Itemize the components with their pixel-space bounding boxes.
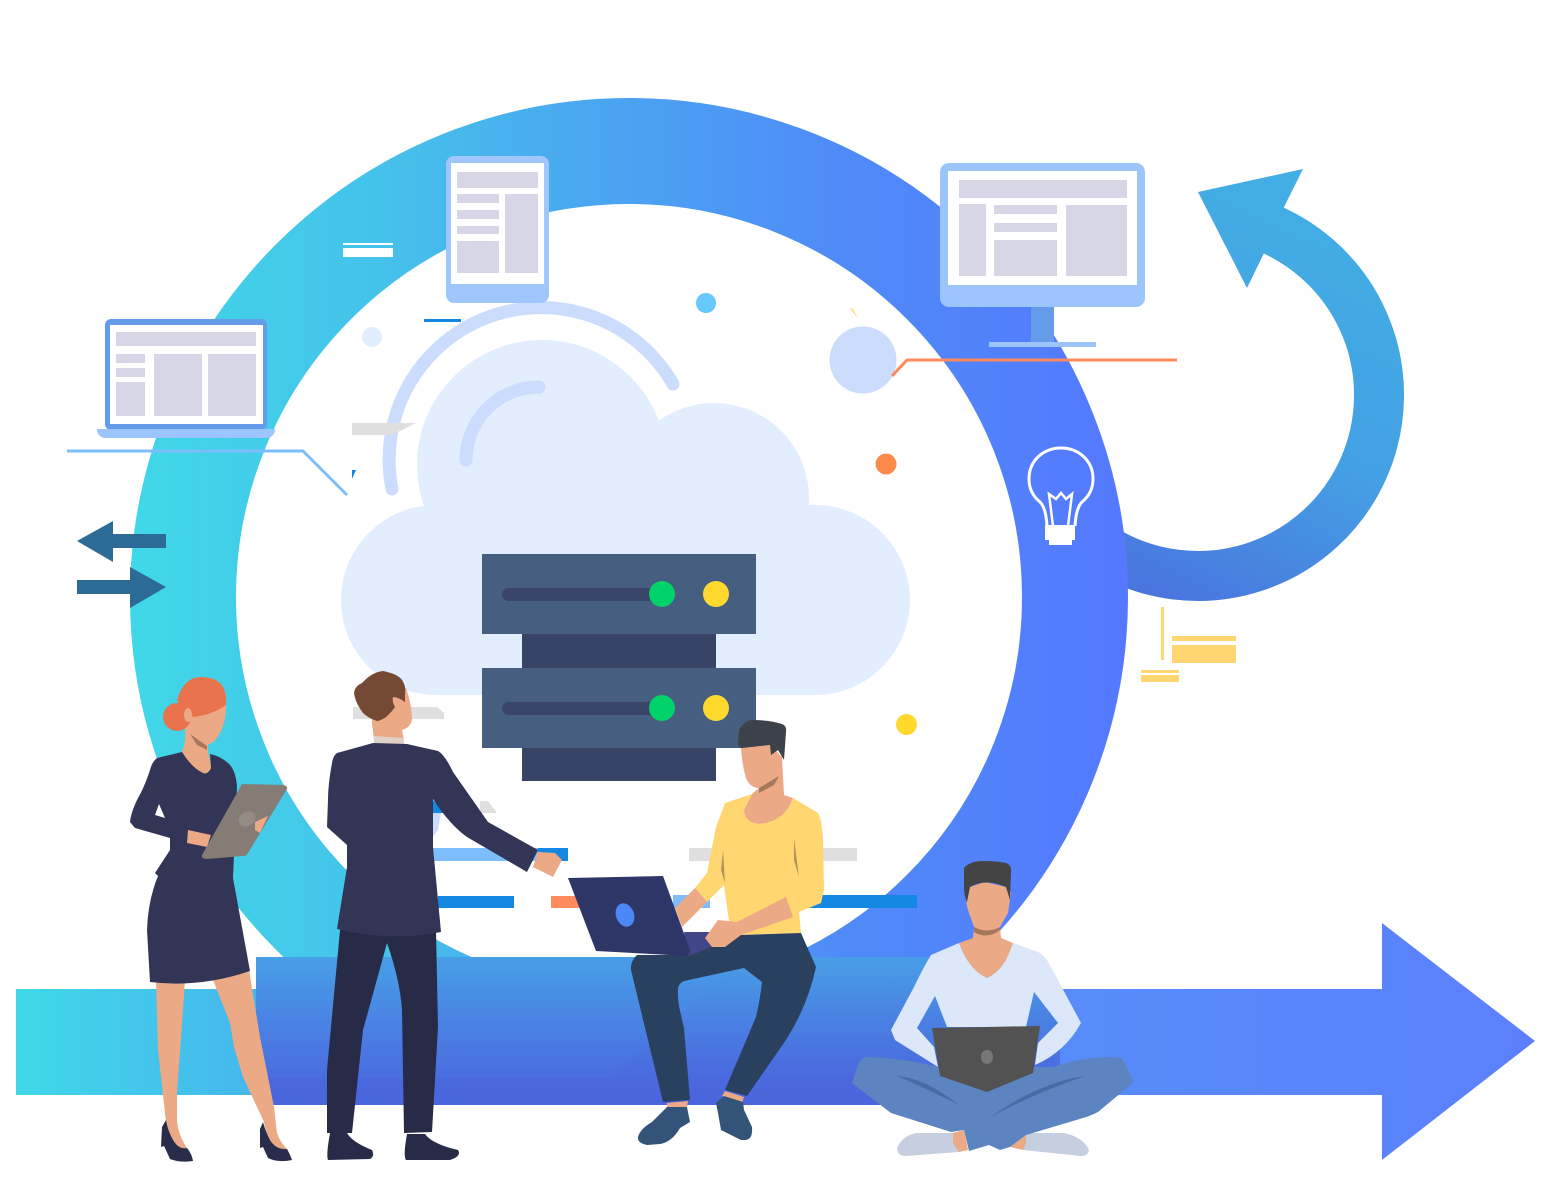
person: standing man in suit bbox=[327, 671, 562, 1160]
collar bbox=[374, 736, 404, 745]
person: seated man with laptop bbox=[568, 720, 824, 1145]
face and neck bbox=[741, 745, 793, 824]
hand bbox=[533, 852, 562, 877]
person: woman with tablet bbox=[130, 677, 292, 1162]
laptop lid bbox=[568, 876, 690, 956]
connector line: orange bbox=[892, 360, 1177, 376]
connector line: light blue bbox=[67, 451, 347, 495]
jacket bbox=[327, 743, 538, 936]
shirt bbox=[695, 794, 824, 935]
laptop bbox=[932, 1026, 1040, 1092]
cloud bbox=[341, 340, 910, 695]
text placeholder bars bbox=[343, 243, 917, 908]
hand left bbox=[187, 830, 211, 847]
icon: light bulb bbox=[1029, 448, 1093, 545]
trousers bbox=[852, 1057, 1134, 1151]
dress bbox=[130, 752, 250, 984]
hair bbox=[738, 720, 786, 760]
large circular ring bbox=[183, 151, 1075, 1043]
person: cross-legged man with laptop bbox=[852, 861, 1134, 1156]
shoes bbox=[638, 1107, 690, 1145]
ankles bbox=[667, 1101, 688, 1107]
legs bbox=[156, 980, 187, 1148]
face and neck bbox=[959, 882, 1013, 978]
hand right bbox=[255, 816, 268, 833]
arrows: left and right exchange bbox=[77, 521, 166, 608]
shoes bbox=[161, 1120, 193, 1162]
icon: laptop with layout bbox=[97, 319, 275, 438]
shoes bbox=[327, 1133, 373, 1160]
server connector upper bbox=[522, 634, 716, 668]
trousers bbox=[631, 933, 816, 1102]
server unit top bbox=[482, 554, 756, 634]
head bbox=[372, 688, 412, 740]
socks bbox=[897, 1133, 959, 1156]
trouser folds bbox=[897, 1076, 959, 1105]
arm upper bbox=[675, 888, 707, 927]
server unit bottom bbox=[482, 668, 756, 748]
floating dots bbox=[362, 293, 917, 735]
arm lower bbox=[705, 897, 793, 947]
ankles bbox=[953, 1130, 968, 1152]
server connector lower bbox=[522, 748, 716, 781]
gradient band bbox=[256, 957, 1060, 1105]
trousers bbox=[327, 930, 438, 1133]
tablet bbox=[202, 784, 287, 859]
icon: tablet with layout bbox=[446, 156, 549, 303]
server stack bbox=[482, 554, 756, 781]
hair bbox=[964, 861, 1011, 902]
horizontal arrow bbox=[16, 923, 1535, 1160]
shirt shadows bbox=[721, 850, 725, 883]
cloud arcs bbox=[389, 308, 673, 489]
head and neck bbox=[182, 700, 226, 775]
hair bbox=[177, 677, 226, 717]
band facet bbox=[256, 957, 742, 1078]
hair bbox=[354, 671, 405, 721]
icon: desktop monitor with layout bbox=[940, 163, 1145, 347]
laptop base bbox=[684, 932, 740, 956]
curved return arrow bbox=[1108, 169, 1379, 576]
yellow note bars bbox=[1141, 607, 1236, 682]
shirt bbox=[891, 943, 1081, 1067]
